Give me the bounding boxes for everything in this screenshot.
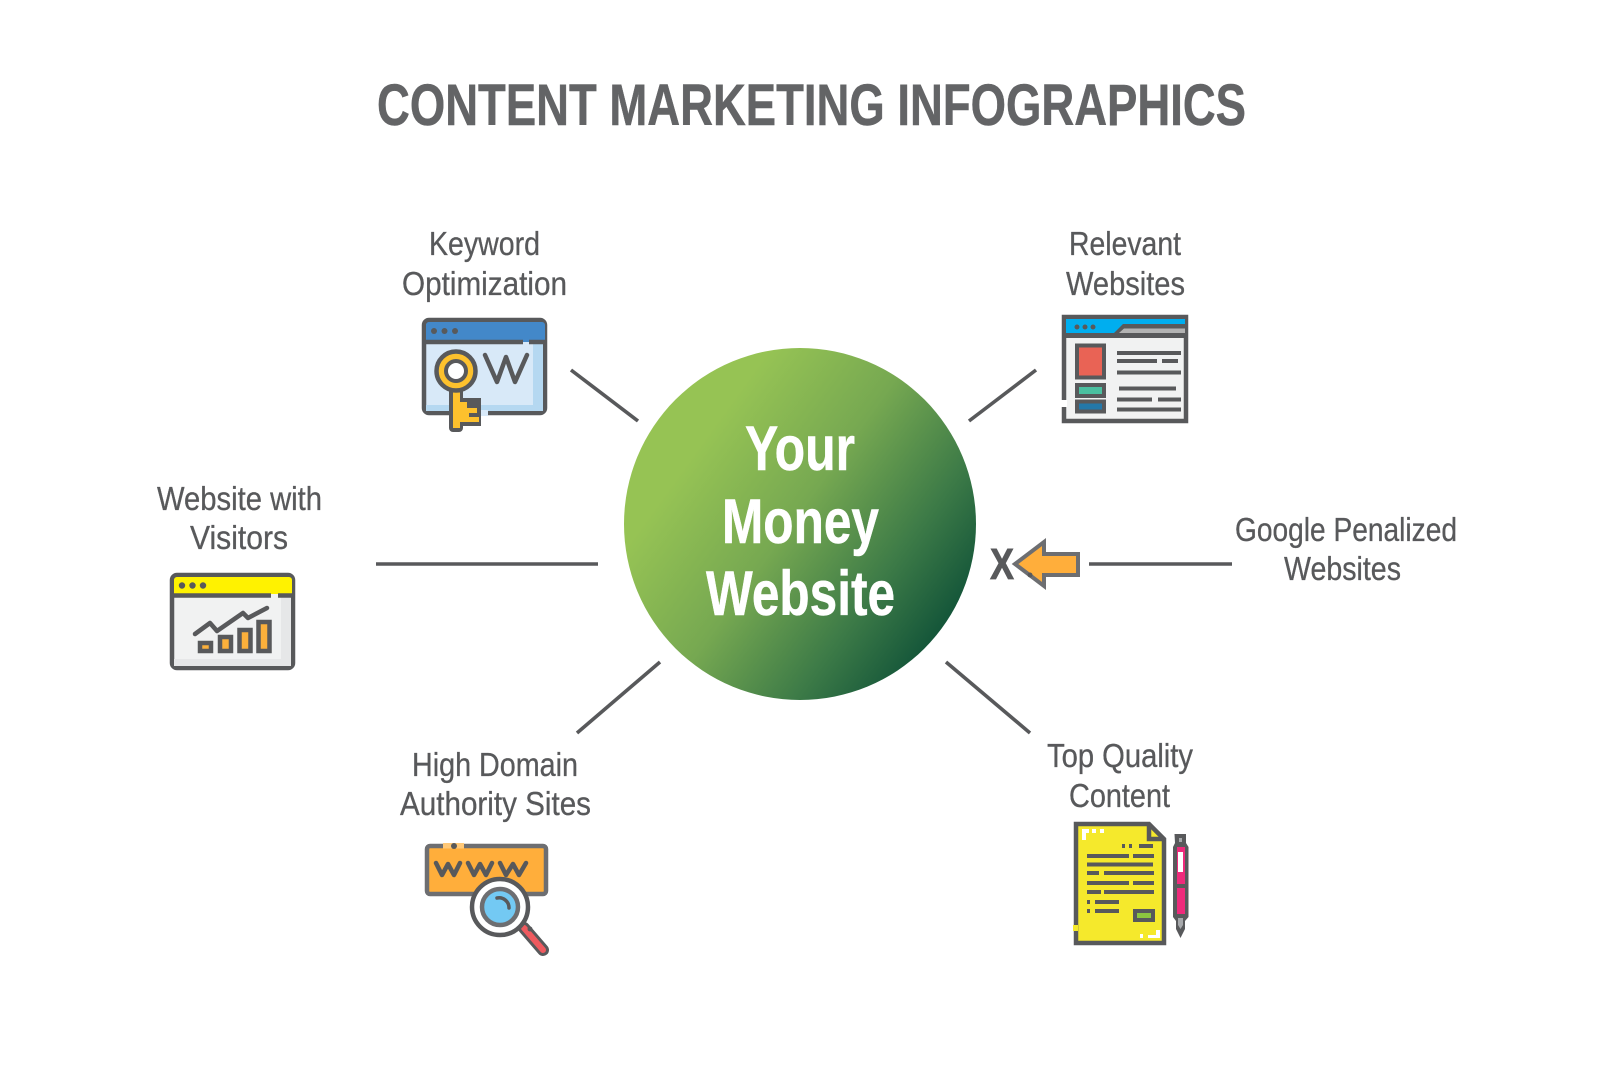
W letter: [485, 355, 527, 382]
title: CONTENT MARKETING INFOGRAPHICS: [377, 73, 1246, 138]
connector: website with visitors: [376, 562, 598, 566]
icon: yellow document: [1073, 824, 1164, 943]
label: Website with Visitors: Visitors: [190, 519, 288, 556]
label: Top Quality Content: Top Quality: [1047, 737, 1193, 774]
label: Website with Visitors: [157, 480, 322, 556]
label: Top Quality Content: Content: [1069, 777, 1170, 814]
connector: google penalized websites: [1089, 562, 1232, 566]
label: Keyword Optimization: Keyword: [429, 225, 540, 262]
label: Keyword Optimization: Optimization: [402, 265, 567, 302]
central circle: Your Money Website: Money: [722, 487, 879, 557]
label: Google Penalized Websites: Websites: [1284, 550, 1401, 587]
label: High Domain Authority Sites: [400, 746, 591, 822]
icon: pink pen: [1173, 834, 1188, 938]
label: Google Penalized Websites: Google Penalized: [1235, 511, 1457, 548]
label: Relevant Websites: Websites: [1066, 265, 1185, 302]
label: Relevant Websites: [1066, 225, 1185, 302]
connector: top quality content: [946, 662, 1030, 733]
label: Website with Visitors: Website with: [157, 480, 322, 517]
connector: keyword optimization: [571, 370, 638, 421]
label: Keyword Optimization: [402, 225, 567, 302]
arrow pointing to the X: [1015, 542, 1078, 586]
icon: website page layout: [1060, 317, 1186, 421]
icon: www with magnifying glass: [427, 843, 546, 950]
connector: relevant websites: [969, 370, 1036, 421]
icon: browser window with growth chart: [172, 575, 293, 668]
central circle: Your Money Website: Website: [706, 559, 895, 629]
central circle: Your Money Website: [624, 348, 976, 700]
label: Google Penalized Websites: [1235, 511, 1457, 587]
connector: high domain authority sites: [577, 662, 660, 733]
icon: browser window with key: [424, 320, 545, 432]
central circle: Your Money Website: Your: [745, 414, 855, 484]
label: High Domain Authority Sites: High Domain: [412, 746, 578, 783]
label: Relevant Websites: Relevant: [1069, 225, 1181, 262]
icon: X mark: X: [990, 540, 1014, 589]
magnifier handle: [524, 926, 543, 950]
key: [436, 352, 481, 432]
label: High Domain Authority Sites: Authority Sites: [400, 785, 591, 822]
label: Top Quality Content: [1047, 737, 1193, 814]
